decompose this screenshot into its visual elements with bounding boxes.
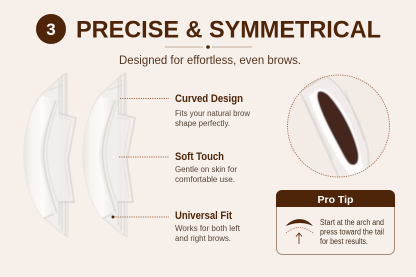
- feature: curved design: [175, 93, 250, 128]
- header: [36, 14, 381, 67]
- feature: universal fit: and right brows.: [175, 234, 231, 243]
- feature: curved design: Curved Design: [175, 93, 243, 105]
- leader lines: [113, 98, 169, 217]
- pro tip card: [276, 190, 395, 254]
- subtitle: Designed for effortless, even brows.: [119, 55, 301, 67]
- pro tip header: Pro Tip: [318, 194, 353, 206]
- title: PRECISE & SYMMETRICAL: [76, 16, 381, 44]
- pro tip text: Start at the arch and: [320, 218, 384, 227]
- stencil: right: [83, 73, 135, 237]
- feature: universal fit: Works for both left: [175, 224, 241, 233]
- feature: soft touch: [175, 151, 237, 184]
- feature: soft touch: Soft Touch: [175, 151, 224, 163]
- feature: soft touch: Gentle on skin for: [175, 165, 237, 174]
- feature: curved design: shape perfectly.: [175, 119, 230, 128]
- title divider: [165, 45, 252, 49]
- pro tip text: [320, 218, 384, 246]
- feature: universal fit: [175, 210, 241, 243]
- feature: curved design: Fits your natural brow: [175, 109, 250, 118]
- brow stencils: [24, 73, 135, 237]
- brow swatch: [317, 91, 358, 165]
- pro tip text: press toward the tail: [320, 228, 384, 236]
- icon: brow with arrow: [286, 219, 313, 244]
- detail circle: [288, 75, 390, 180]
- number badge: 3: [46, 20, 56, 39]
- stencil: left: [24, 73, 76, 237]
- pro tip text: for best results.: [320, 237, 368, 246]
- number badge: [36, 14, 66, 44]
- feature: universal fit: Universal Fit: [175, 210, 232, 222]
- feature: soft touch: comfortable use.: [175, 175, 235, 184]
- leader anchor dot: [112, 216, 114, 218]
